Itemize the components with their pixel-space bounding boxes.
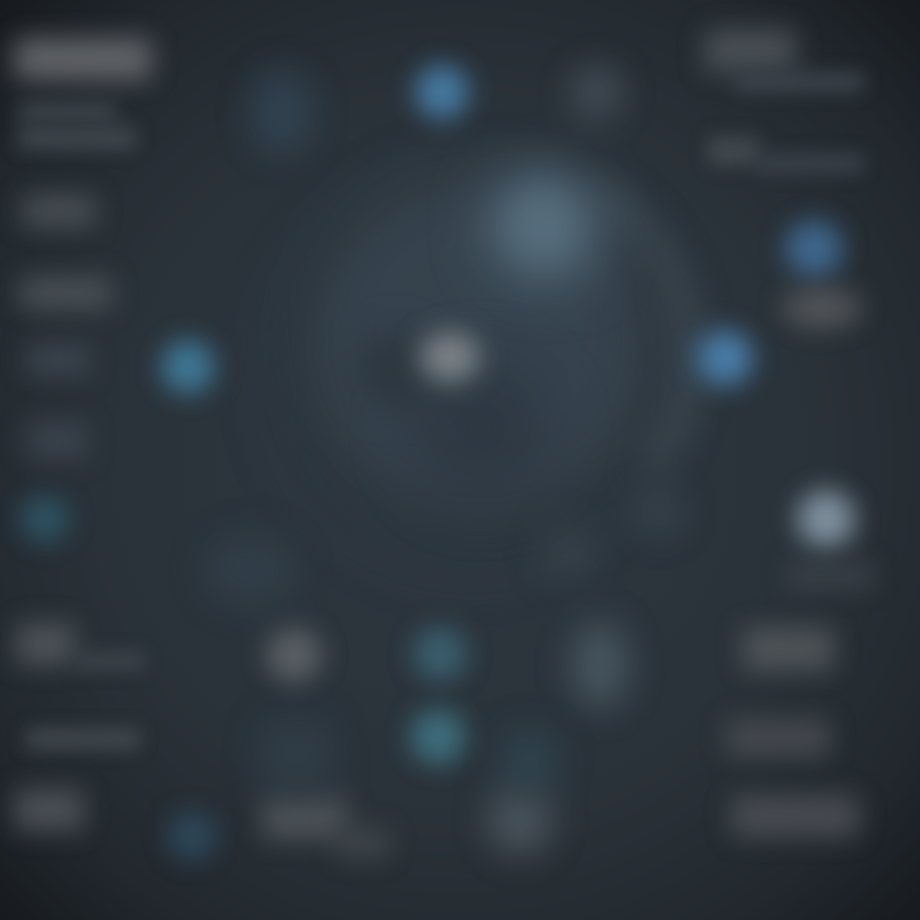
node: lower right of centre xyxy=(572,621,628,709)
label: upper right node xyxy=(782,288,862,328)
block: lower ring accent xyxy=(540,524,596,580)
node: top right faint xyxy=(571,66,623,118)
node: lower right pale xyxy=(797,490,855,548)
bottom centre-left: faint column xyxy=(260,720,332,790)
left column: heading xyxy=(14,38,152,80)
node: bottom blue xyxy=(168,812,216,860)
block: lower right of ring xyxy=(636,488,684,536)
node: centre grey xyxy=(420,332,480,382)
node: top blue xyxy=(415,65,469,119)
block: lower left faint xyxy=(202,532,298,608)
node: left blue xyxy=(161,340,215,394)
node: top left faint xyxy=(250,68,314,156)
node: left teal xyxy=(21,495,69,543)
node: bottom grey xyxy=(488,786,552,854)
node: lower centre teal xyxy=(413,627,467,681)
node: bottom teal faint xyxy=(500,726,560,794)
lower left column: text blocks xyxy=(14,623,144,831)
lower right: text blocks xyxy=(726,563,874,837)
left column: text blocks xyxy=(18,102,136,460)
bottom centre-left: text block xyxy=(262,797,390,857)
top right: text blocks xyxy=(704,29,864,173)
node: right blue xyxy=(697,330,753,386)
node: lower left grey xyxy=(266,627,322,683)
node: upper right blue xyxy=(785,220,843,278)
central circular diagram xyxy=(255,155,691,585)
node: bottom centre teal xyxy=(410,709,466,765)
